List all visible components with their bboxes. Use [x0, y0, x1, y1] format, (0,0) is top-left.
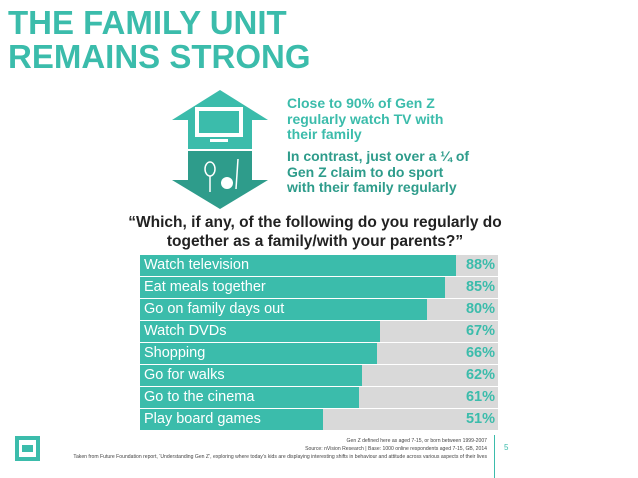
bar chart: Watch television [144, 257, 249, 273]
bar chart: 88% [466, 257, 495, 273]
callout: TV: Close to 90% of Gen Z [287, 95, 435, 111]
icon: logo [15, 436, 40, 461]
question: “Which, if any, of the following do you regularly do together as a family/with your parents?” [128, 214, 502, 250]
bar chart: 85% [466, 279, 495, 295]
bar chart: Go for walks [144, 367, 225, 383]
title: THE FAMILY UNIT [8, 4, 287, 41]
footer notes: Source: nVision Research | Base: 1000 online respondents aged 7-15, GB, 2014 [305, 446, 487, 452]
title [8, 4, 311, 75]
bar chart: 51% [466, 411, 495, 427]
footer notes: Gen Z defined here as aged 7-15, or born between 1999-2007 [347, 438, 487, 444]
callout: sport: Gen Z claim to do sport [287, 164, 443, 180]
callout: TV: their family [287, 126, 362, 142]
bar chart: Go to the cinema [144, 389, 254, 405]
bar chart: 80% [466, 301, 495, 317]
bar chart: Watch DVDs [144, 323, 226, 339]
page number: 5 [504, 443, 508, 452]
bar chart: 62% [466, 367, 495, 383]
callout: TV: regularly watch TV with [287, 110, 443, 126]
title: REMAINS STRONG [8, 38, 311, 75]
callout: sport: In contrast, just over a ¼ of [287, 148, 469, 164]
footer notes: Taken from Future Foundation report, ‘Understanding Gen Z’, exploring where today’s kids are displaying interesting shifts in behaviour and attitude across various aspects of their lives [73, 454, 487, 460]
footer notes [73, 438, 487, 460]
bar chart: 67% [466, 323, 495, 339]
callout: sport: with their family regularly [287, 179, 457, 195]
bar chart: 61% [466, 389, 495, 405]
callout: sport [287, 148, 470, 195]
icon: up/down arrows with TV and sport [172, 90, 268, 209]
bar chart: Go on family days out [144, 301, 284, 317]
callout: TV [287, 95, 443, 142]
bar chart: 66% [466, 345, 495, 361]
bar chart: Play board games [144, 411, 261, 427]
bar chart: Eat meals together [144, 279, 266, 295]
bar chart: Shopping [144, 345, 205, 361]
